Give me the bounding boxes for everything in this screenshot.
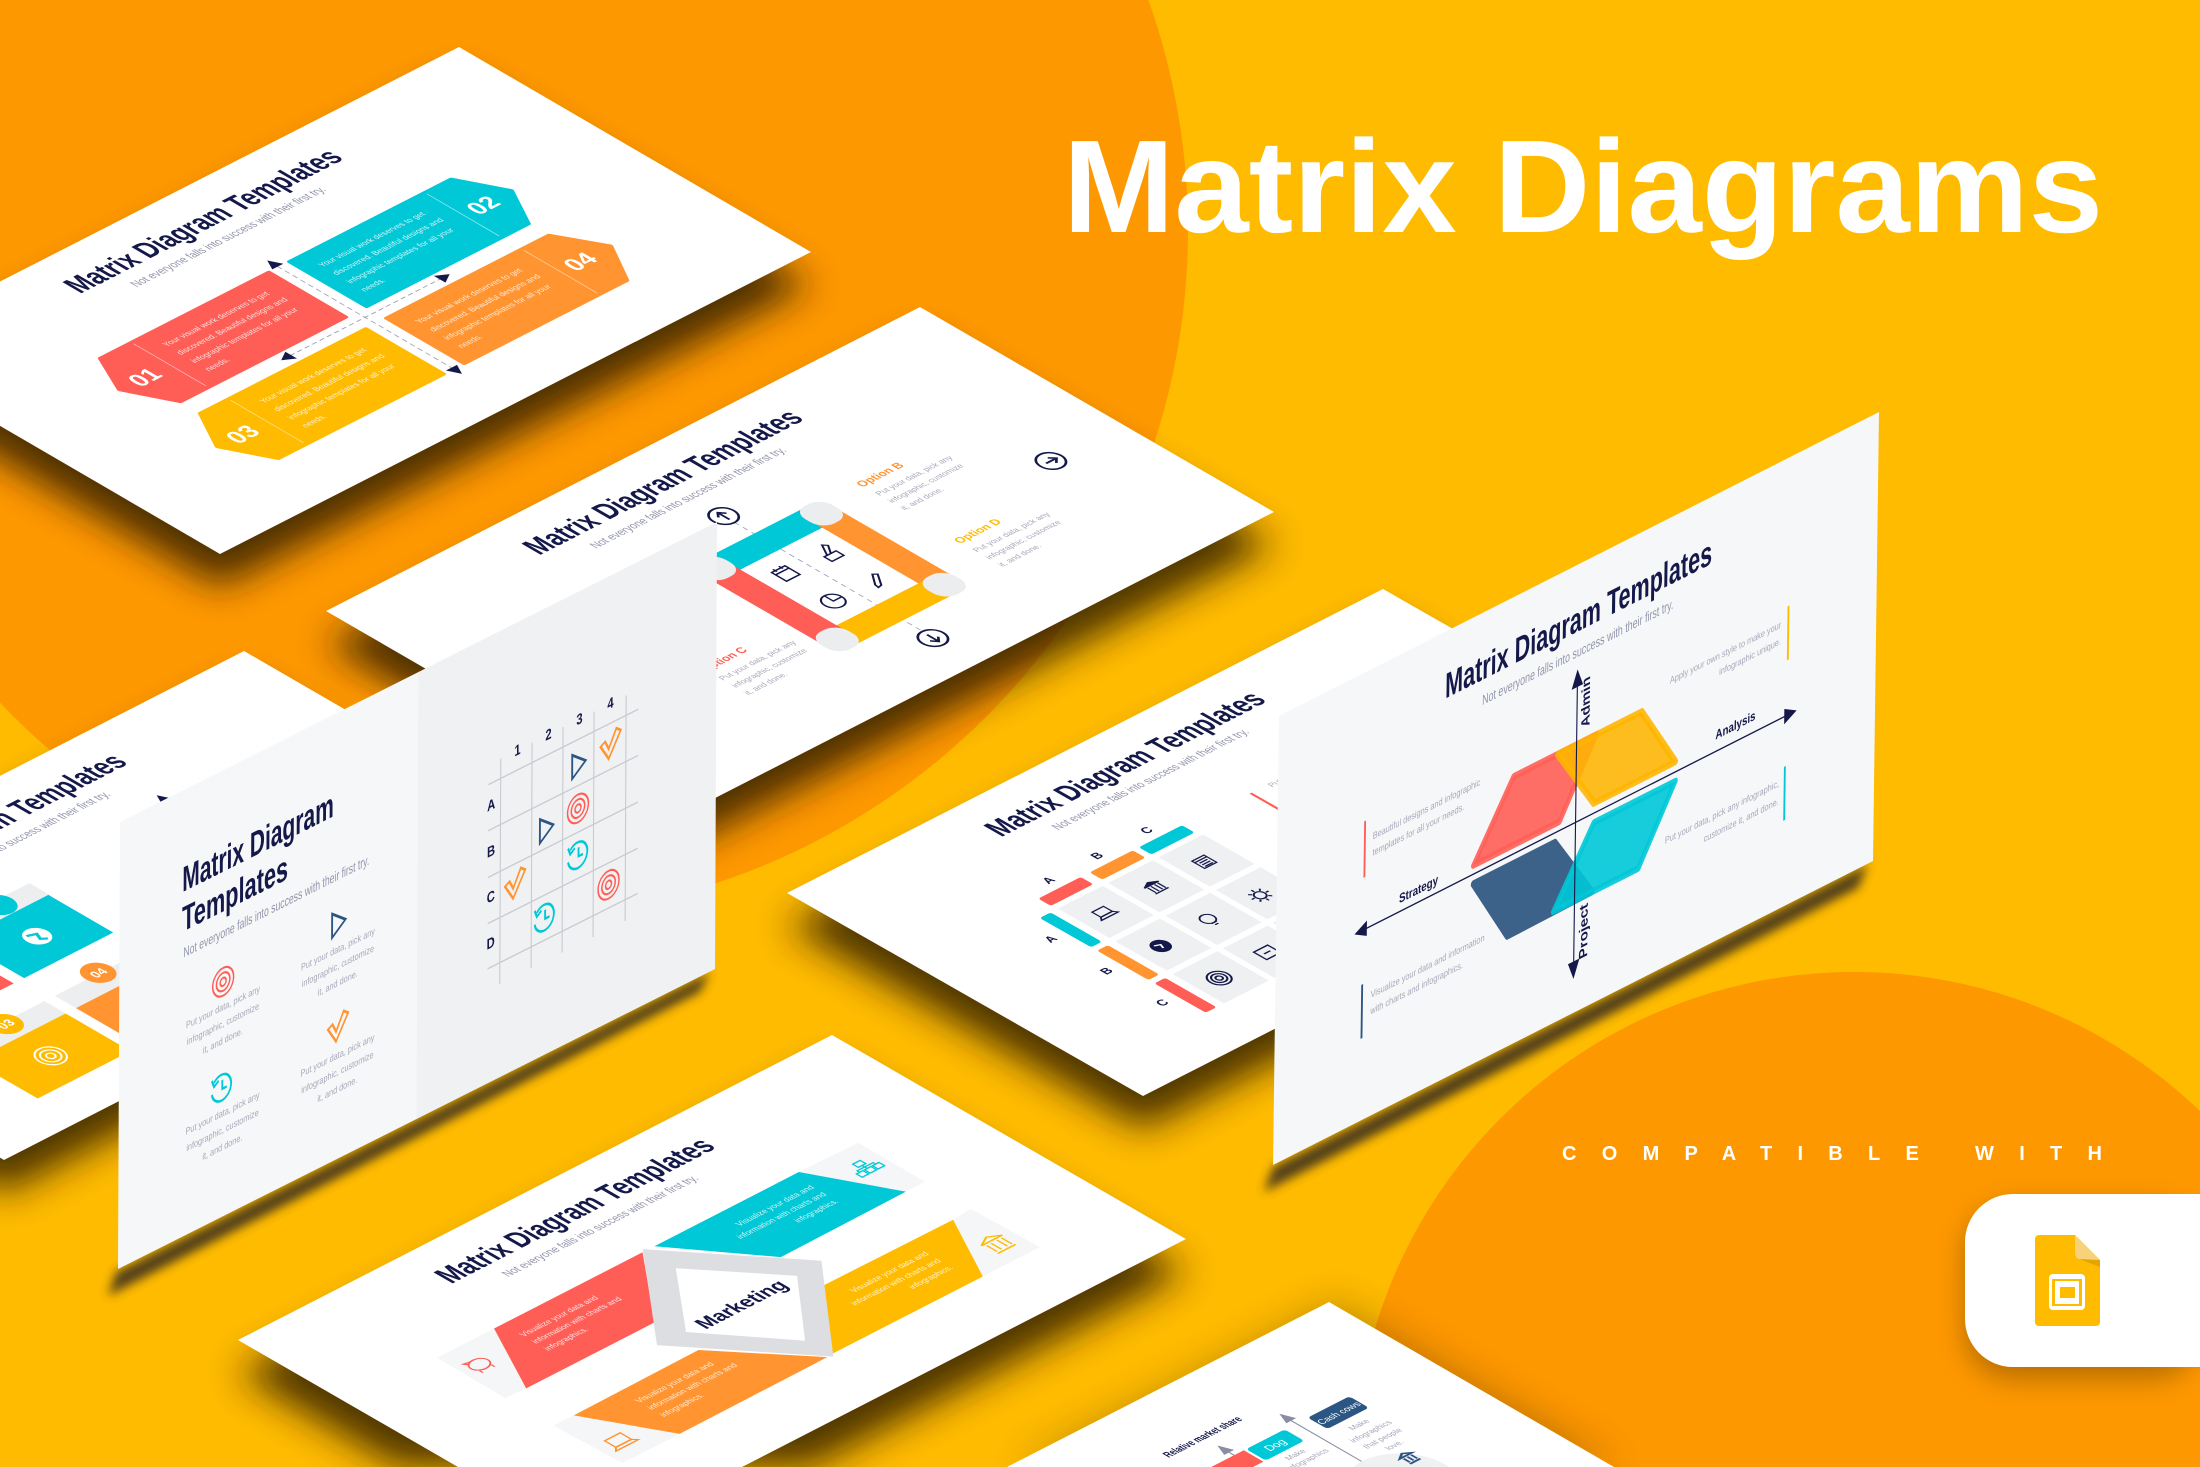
option D	[951, 500, 1078, 569]
compatible with label: COMPATIBLE WITH	[1562, 1143, 2102, 1165]
check item: infographic, customize	[301, 1049, 374, 1096]
option D: infographic, customize	[983, 518, 1064, 561]
teal band	[654, 1152, 907, 1286]
orange band: Visualize your data and	[632, 1360, 717, 1404]
option C: Put your data, pick any	[716, 638, 799, 682]
dog pill	[1246, 1429, 1304, 1461]
cash cows pill: Cash cows	[1315, 1400, 1365, 1426]
icon tiles	[436, 1142, 1042, 1464]
yellow band: information with charts and	[848, 1257, 944, 1307]
cash cows text: that people	[1360, 1426, 1405, 1450]
slide heading	[182, 785, 334, 940]
option B	[853, 444, 981, 512]
orange block	[41, 942, 231, 1046]
callout top right: Apply your own style to make your	[1670, 619, 1781, 686]
slide subtitle: Not everyone falls into success with their first try.	[586, 445, 790, 550]
orange circle top left	[0, 0, 1188, 918]
option C: it, and done.	[741, 671, 790, 696]
badge shadow	[1965, 1206, 2200, 1379]
slide: numbered pentagons	[0, 47, 811, 554]
option B: infographic, customize	[885, 462, 966, 504]
triangle item	[301, 892, 376, 1007]
badge: google slides	[1965, 1194, 2200, 1367]
cash cows text: love.	[1382, 1439, 1406, 1452]
red band: information with charts and	[529, 1295, 625, 1345]
slide shadow 2	[326, 340, 1274, 849]
column and row letters: B	[1096, 965, 1117, 977]
grid labels	[487, 694, 614, 953]
axis labels: Project	[1577, 901, 1591, 961]
card 04 orange: needs.	[455, 333, 485, 349]
arrows	[1215, 1413, 1373, 1467]
card 02 teal: infographic templates for all your	[344, 226, 457, 285]
center diamond	[562, 1206, 915, 1399]
cash cows text: infographics	[1347, 1419, 1395, 1444]
card 04 orange: infographic templates for all your	[441, 283, 554, 341]
card 03 yellow: infographic templates for all your	[285, 362, 398, 421]
callout bottom right: customize it, and done.	[1704, 796, 1779, 844]
standing slide shadow left	[108, 972, 710, 1296]
icon: piggy bank	[463, 1355, 497, 1374]
option B: Option B	[853, 461, 907, 489]
icon: globe	[1145, 937, 1177, 955]
option B: it, and done.	[898, 486, 946, 511]
arrow buttons	[701, 390, 1179, 650]
ring caps	[686, 498, 973, 655]
callout top left: Beautiful designs and infographic	[1373, 776, 1481, 842]
option B: Put your data, pick any	[872, 454, 956, 497]
ring inner	[741, 528, 918, 625]
icon: bank	[1396, 1450, 1421, 1464]
slide heading: Matrix Diagram	[182, 785, 334, 900]
cash cows text	[1335, 1412, 1418, 1458]
icon: bank	[976, 1232, 1017, 1254]
target item: Put your data, pick any	[186, 983, 260, 1031]
arrow mark	[151, 793, 172, 804]
slide: grid matrix standing	[118, 522, 717, 1269]
icon: laptop	[601, 1431, 638, 1451]
slide heading: Matrix Diagram Templates	[1445, 531, 1712, 706]
teal band: Visualize your data and	[733, 1184, 817, 1227]
slide: abc grid	[787, 589, 1739, 1096]
slide shadow 6	[1013, 1302, 1620, 1467]
clock item: infographic, customize	[186, 1106, 259, 1154]
red band: Visualize your data and	[517, 1294, 601, 1338]
clock item: it, and done.	[202, 1131, 242, 1162]
slide: options ring	[326, 307, 1274, 816]
grid labels: D	[487, 933, 495, 953]
icon: laptop	[1089, 905, 1118, 920]
icon: slides document	[2035, 1235, 2100, 1326]
card 01 red	[82, 272, 346, 413]
card 02 teal: needs.	[358, 277, 388, 293]
column bars	[1038, 825, 1195, 906]
cash cows pill	[1308, 1396, 1369, 1429]
option C: infographic, customize	[729, 647, 810, 689]
slide shadow 5	[238, 1068, 1186, 1467]
check item	[300, 995, 375, 1113]
target item	[186, 949, 261, 1065]
dashed axis	[734, 522, 924, 632]
slide subtitle: Not everyone falls into success with their first try.	[183, 851, 369, 961]
slide: marketing diamond	[238, 1035, 1186, 1467]
card 01 red: needs.	[202, 356, 232, 373]
slide subtitle: Not everyone falls into success with their first try.	[127, 184, 330, 289]
dashed inner axis	[781, 549, 877, 605]
callout top right: infographic unique.	[1719, 635, 1781, 677]
triangle item: Put your data, pick any	[301, 925, 375, 973]
card 04 orange: Your visual work deserves to get	[412, 266, 525, 325]
triangle item: it, and done.	[318, 967, 358, 998]
card 03 yellow: needs.	[299, 413, 329, 429]
main title: Matrix Diagrams	[1063, 113, 2103, 260]
slide: numbered blocks (partly hidden)	[0, 651, 598, 1160]
column and row letters: C	[1136, 825, 1157, 836]
red band	[456, 1252, 713, 1388]
slide heading: Matrix Diagram Templates	[426, 1133, 723, 1288]
slide: growth share matrix (cropped)	[1007, 1302, 1614, 1467]
slide subtitle: Not everyone falls into success with their first try.	[498, 1173, 702, 1279]
partly hidden callout line	[1251, 793, 1290, 816]
option C: Option C	[697, 645, 751, 674]
icon: network	[846, 1156, 885, 1177]
grid labels: A	[487, 795, 495, 815]
center diamond: Marketing	[689, 1277, 794, 1332]
triangle item: infographic, customize	[302, 942, 374, 990]
card 04 orange: discovered. Beautiful designs and	[426, 273, 543, 333]
card 01 red: 01	[122, 365, 169, 391]
slide subtitle: Not everyone falls into success with their first try.	[1482, 595, 1674, 708]
axis labels: Admin	[1580, 674, 1593, 730]
target item: it, and done.	[203, 1025, 243, 1056]
axis labels: Analysis	[1715, 707, 1756, 743]
column and row letters: B	[1087, 850, 1107, 861]
teal band: infographics.	[791, 1198, 841, 1224]
orange circle bottom right	[1354, 972, 2200, 1467]
row bars	[1040, 912, 1217, 1013]
gray tabs	[0, 883, 168, 1062]
ring bars	[689, 499, 970, 654]
orange block: 04	[86, 966, 112, 980]
grid labels: 2	[545, 725, 552, 744]
card 02 teal: 02	[460, 193, 508, 219]
slide shadow 4	[0, 684, 598, 1193]
icon: bank	[1141, 879, 1169, 894]
option D: Option D	[951, 517, 1005, 546]
card 03 yellow: 03	[220, 422, 267, 448]
standing slide shadow right	[1264, 864, 1868, 1192]
icon: sun	[1243, 886, 1277, 905]
yellow band: infographics.	[906, 1264, 956, 1290]
axes	[1354, 560, 1797, 1088]
dog text: Make	[1282, 1447, 1309, 1462]
center circle	[1352, 1440, 1450, 1467]
orange band: infographics.	[657, 1392, 707, 1418]
grid labels: 1	[514, 740, 521, 760]
axis labels: Strategy	[1399, 872, 1438, 907]
slide subtitle: Not everyone falls into success with their first try.	[1048, 727, 1253, 832]
card 03 yellow: discovered. Beautiful designs and	[271, 352, 387, 413]
card 03 yellow: Your visual work deserves to get	[257, 346, 369, 404]
slide heading: Matrix Diagram Templates	[514, 405, 811, 559]
partly hidden callout text: Put your data, pick any	[1265, 745, 1348, 788]
option D: Put your data, pick any	[970, 510, 1053, 553]
slide heading: Templates	[182, 847, 288, 940]
slide shadow 7	[787, 622, 1739, 1129]
ring icons	[767, 543, 891, 611]
red pill	[1211, 1450, 1263, 1467]
cash cows text: Make	[1345, 1417, 1372, 1432]
slide: quadrant chart standing	[1273, 412, 1879, 1165]
orange band	[573, 1318, 828, 1454]
card 03 yellow	[179, 329, 443, 469]
yellow band	[765, 1219, 1019, 1354]
card 02 teal: discovered. Beautiful designs and	[329, 216, 446, 276]
red band: infographics.	[541, 1326, 591, 1352]
option D: it, and done.	[995, 542, 1044, 568]
yellow block with target	[0, 995, 131, 1099]
card 04 orange: 04	[557, 249, 605, 275]
teal block with globe	[0, 879, 113, 978]
callout top left: templates for all your needs.	[1372, 801, 1464, 858]
red block	[0, 946, 14, 1031]
card 01 red: Your visual work deserves to get	[160, 290, 272, 348]
callout bottom left: with charts and infographics.	[1370, 959, 1463, 1017]
icon: fingerprint	[1202, 969, 1237, 988]
axis labels	[1397, 591, 1757, 1053]
callout bottom left: Visualize your data and information	[1371, 932, 1485, 1000]
orange band: information with charts and	[644, 1361, 740, 1411]
clock item	[185, 1055, 260, 1171]
grid icons	[505, 726, 621, 951]
target item: infographic, customize	[187, 1000, 259, 1047]
column and row letters: A	[1039, 875, 1059, 886]
callout bottom right: Put your data, pick any infographic,	[1665, 778, 1779, 846]
teal band: information with charts and	[733, 1191, 829, 1240]
card 02 teal: Your visual work deserves to get	[315, 210, 428, 268]
check item: it, and done.	[317, 1074, 357, 1105]
dashed axes	[183, 217, 547, 417]
grid labels: 3	[576, 709, 583, 729]
slide heading: Matrix Diagram Templates	[55, 144, 351, 298]
icon: book	[1254, 945, 1281, 960]
option C	[697, 628, 824, 697]
icon: calendar	[1192, 855, 1217, 868]
grid labels: C	[487, 887, 495, 907]
column and row letters	[985, 825, 1324, 1008]
quadrant shapes	[1472, 694, 1676, 954]
yellow band: Visualize your data and	[847, 1250, 931, 1294]
side rules	[1361, 606, 1789, 1038]
column and row letters: A	[1041, 934, 1061, 945]
axis title: Relative market share	[1161, 1415, 1246, 1459]
grid labels: B	[487, 841, 495, 861]
card 02 teal	[290, 168, 550, 306]
slide shadow 1	[0, 80, 811, 587]
check item: Put your data, pick any	[300, 1031, 375, 1079]
card 04 orange	[387, 224, 650, 363]
grid labels: 4	[607, 694, 614, 713]
tiles	[1058, 835, 1369, 1003]
card 01 red: discovered. Beautiful designs and	[174, 296, 290, 356]
column and row letters: C	[1152, 997, 1173, 1008]
slide heading: Matrix Diagram Templates	[976, 687, 1274, 841]
clock item: Put your data, pick any	[186, 1089, 260, 1137]
dog text	[1273, 1441, 1331, 1467]
card 01 red: infographic templates for all your	[188, 306, 301, 364]
grid lines	[487, 689, 638, 990]
dog pill: Dog	[1262, 1438, 1290, 1453]
icon: lightbulb	[1196, 913, 1222, 927]
